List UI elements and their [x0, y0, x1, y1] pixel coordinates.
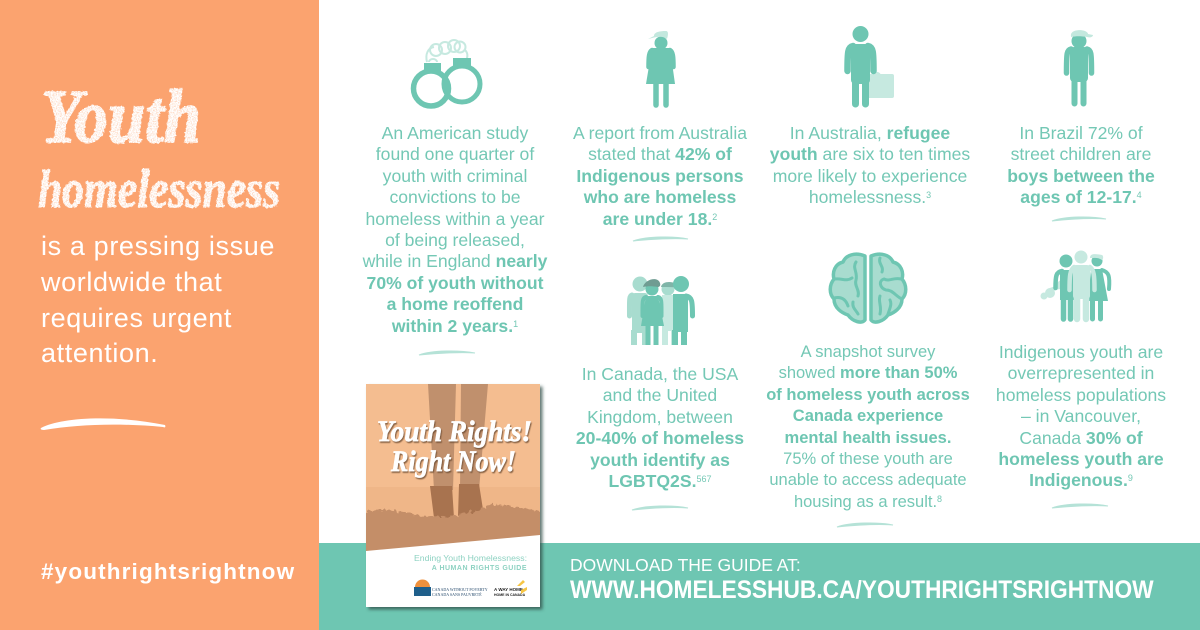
text: Indigenous Australia: Indigenous persons: [576, 166, 744, 186]
text: lead statement: worldwide that: [41, 267, 222, 297]
text: Indigenous Vancouver: – in Vancouver,: [1021, 406, 1141, 426]
text: LGBTQ2S: LGBTQ2S.567: [608, 471, 712, 491]
text: Brazil: In Brazil 72% of: [1019, 123, 1143, 143]
text: criminal convictions: a home reoffend: [387, 294, 523, 314]
ground: [366, 503, 540, 551]
text: criminal convictions: homeless within a year: [366, 209, 544, 229]
text: LGBTQ2S: and the United: [603, 385, 717, 405]
text: refugee youth: In Australia, refugee: [790, 123, 950, 143]
text: Brazil: ages of 12-17.4: [1020, 187, 1142, 207]
guide cover: CANADA SANS PAUVRETÉ: [432, 592, 482, 597]
text: Brazil: street children are: [1011, 144, 1151, 164]
brush stroke: sidebar divider: [40, 418, 166, 430]
text: criminal convictions: youth with criminal: [383, 166, 527, 186]
text: LGBTQ2S: 20-40% of homeless: [576, 428, 744, 448]
text: Brazil: boys between the: [1007, 166, 1155, 186]
brush: mental health column: [837, 523, 893, 527]
text: Indigenous Vancouver: Canada 30% of: [1019, 428, 1143, 448]
text: criminal convictions: of being released,: [385, 230, 525, 250]
icon: handcuffs: [414, 40, 480, 106]
text: mental health: mental health issues.: [785, 429, 951, 447]
text: download URL: WWW.HOMELESSHUB.CA/YOUTHRIGHTSRIGHTNOW: [570, 577, 1154, 604]
title: Youth homelessness: Youth: [41, 75, 201, 159]
brush: column 1: [419, 351, 475, 355]
guide cover: A HUMAN RIGHTS GUIDE: [432, 565, 527, 572]
text: lead statement: [41, 231, 275, 368]
text: mental health: A snapshot survey: [801, 343, 935, 361]
text: mental health: [766, 343, 970, 511]
text: refugee youth: more likely to experience: [773, 166, 967, 186]
text: criminal convictions: within 2 years.1: [392, 316, 518, 336]
text: LGBTQ2S: Kingdom, between: [587, 407, 733, 427]
text: LGBTQ2S: youth identify as: [590, 450, 730, 470]
text: mental health: unable to access adequate: [769, 471, 967, 489]
icon: brain: [830, 254, 906, 322]
hashtag: #youthrightsrightnow: [41, 559, 295, 584]
text: download prompt: DOWNLOAD THE GUIDE AT:: [570, 555, 801, 575]
text: Indigenous Vancouver: homeless youth are: [998, 449, 1164, 469]
text: LGBTQ2S: [576, 364, 744, 491]
cover title: Right Now!: [390, 445, 516, 478]
text: mental health: of homeless youth across: [766, 386, 970, 404]
text: criminal convictions: convictions to be: [389, 187, 521, 207]
text: Indigenous Vancouver: homeless populations: [996, 385, 1166, 405]
brush: Indigenous column: [1052, 504, 1108, 508]
icon: group of four youth: [629, 276, 692, 345]
brush: report column: [633, 237, 688, 241]
cover subtitle: Ending Youth Homelessness:: [414, 553, 527, 563]
text: refugee youth: youth are six to ten times: [770, 144, 970, 164]
icon: girl with cap: [646, 31, 675, 105]
guide cover: [366, 384, 545, 612]
text: Indigenous Australia: [573, 123, 748, 229]
text: Indigenous Australia: who are homeless: [584, 187, 736, 207]
cover title: [377, 415, 532, 478]
text: Indigenous Vancouver: Indigenous.9: [1029, 470, 1133, 490]
text: Indigenous Vancouver: overrepresented in: [1008, 363, 1154, 383]
title: Youth homelessness: [38, 75, 280, 219]
panel: teal download band: [319, 543, 1200, 630]
white footer: [366, 535, 540, 607]
text: Indigenous Australia: are under 18.2: [603, 209, 717, 229]
text: criminal convictions: An American study: [382, 123, 528, 143]
text: Indigenous Australia: stated that 42% of: [588, 144, 732, 164]
icon: family of three: [1040, 250, 1109, 319]
text: Indigenous Vancouver: [996, 342, 1166, 490]
cover logos: [414, 587, 431, 596]
text: Indigenous Australia: A report from Australia: [573, 123, 747, 143]
text: criminal convictions: 70% of youth without: [367, 273, 543, 293]
text: mental health: showed more than 50%: [779, 364, 957, 382]
hazy band: [366, 487, 540, 517]
panel: orange sidebar: [0, 0, 319, 630]
icon: boy with cap: [1066, 30, 1093, 103]
text: refugee youth: [770, 123, 970, 207]
cover title: Youth Rights!: [377, 415, 532, 448]
text: lead statement: is a pressing issue: [41, 231, 275, 261]
text: lead statement: attention.: [41, 338, 158, 368]
text: mental health: Canada experience: [793, 407, 943, 425]
boots: [430, 486, 454, 518]
guide cover: HOME IN CANADA: [494, 593, 526, 597]
text: criminal convictions: [362, 123, 548, 336]
text: criminal convictions: while in England nearly: [363, 251, 547, 271]
brush: Brazil column: [1052, 217, 1106, 221]
text: criminal convictions: found one quarter of: [376, 144, 534, 164]
text: Indigenous Vancouver: Indigenous youth are: [999, 342, 1163, 362]
text: refugee youth: homelessness.3: [809, 187, 931, 207]
text: lead statement: requires urgent: [41, 303, 232, 333]
icon: refugee man with suitcase: [848, 26, 894, 104]
text: LGBTQ2S: In Canada, the USA: [582, 364, 738, 384]
brush: LGBTQ column: [632, 506, 688, 510]
legs: [428, 384, 456, 490]
text: mental health: 75% of these youth are: [783, 450, 953, 468]
text: Brazil: [1007, 123, 1155, 207]
guide cover: CANADA WITHOUT POVERTY: [432, 587, 488, 592]
text: mental health: housing as a result.8: [794, 493, 942, 511]
guide cover: A WAY HOME: [494, 587, 523, 592]
